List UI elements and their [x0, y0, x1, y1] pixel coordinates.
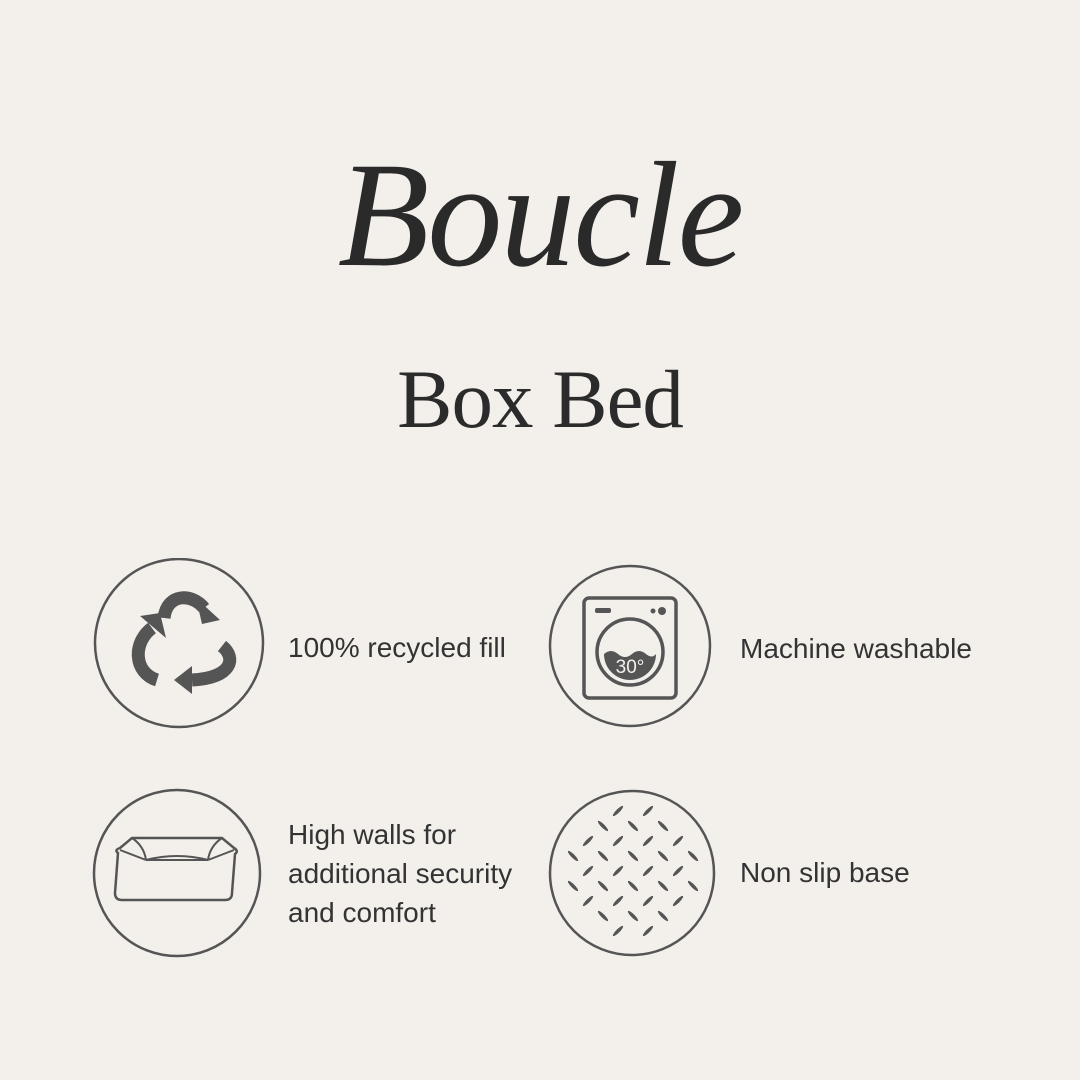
icon: box bed	[92, 788, 262, 958]
text: high walls: additional security	[288, 858, 512, 889]
icon: recycle	[94, 558, 264, 728]
subtitle: Box Bed: Box Bed	[397, 353, 683, 445]
text: high walls: High walls for	[288, 819, 456, 850]
icon: non slip base	[548, 790, 716, 956]
icon: washing machine	[548, 564, 712, 728]
title: Boucle script: Boucle	[338, 132, 742, 298]
text: non slip base: Non slip base	[740, 857, 910, 888]
icon: washing machine: 30°	[616, 657, 644, 678]
text: high walls: and comfort	[288, 897, 436, 928]
text: high walls	[288, 819, 512, 928]
text: machine washable: Machine washable	[740, 633, 972, 664]
text: recycled fill: 100% recycled fill	[288, 632, 506, 663]
